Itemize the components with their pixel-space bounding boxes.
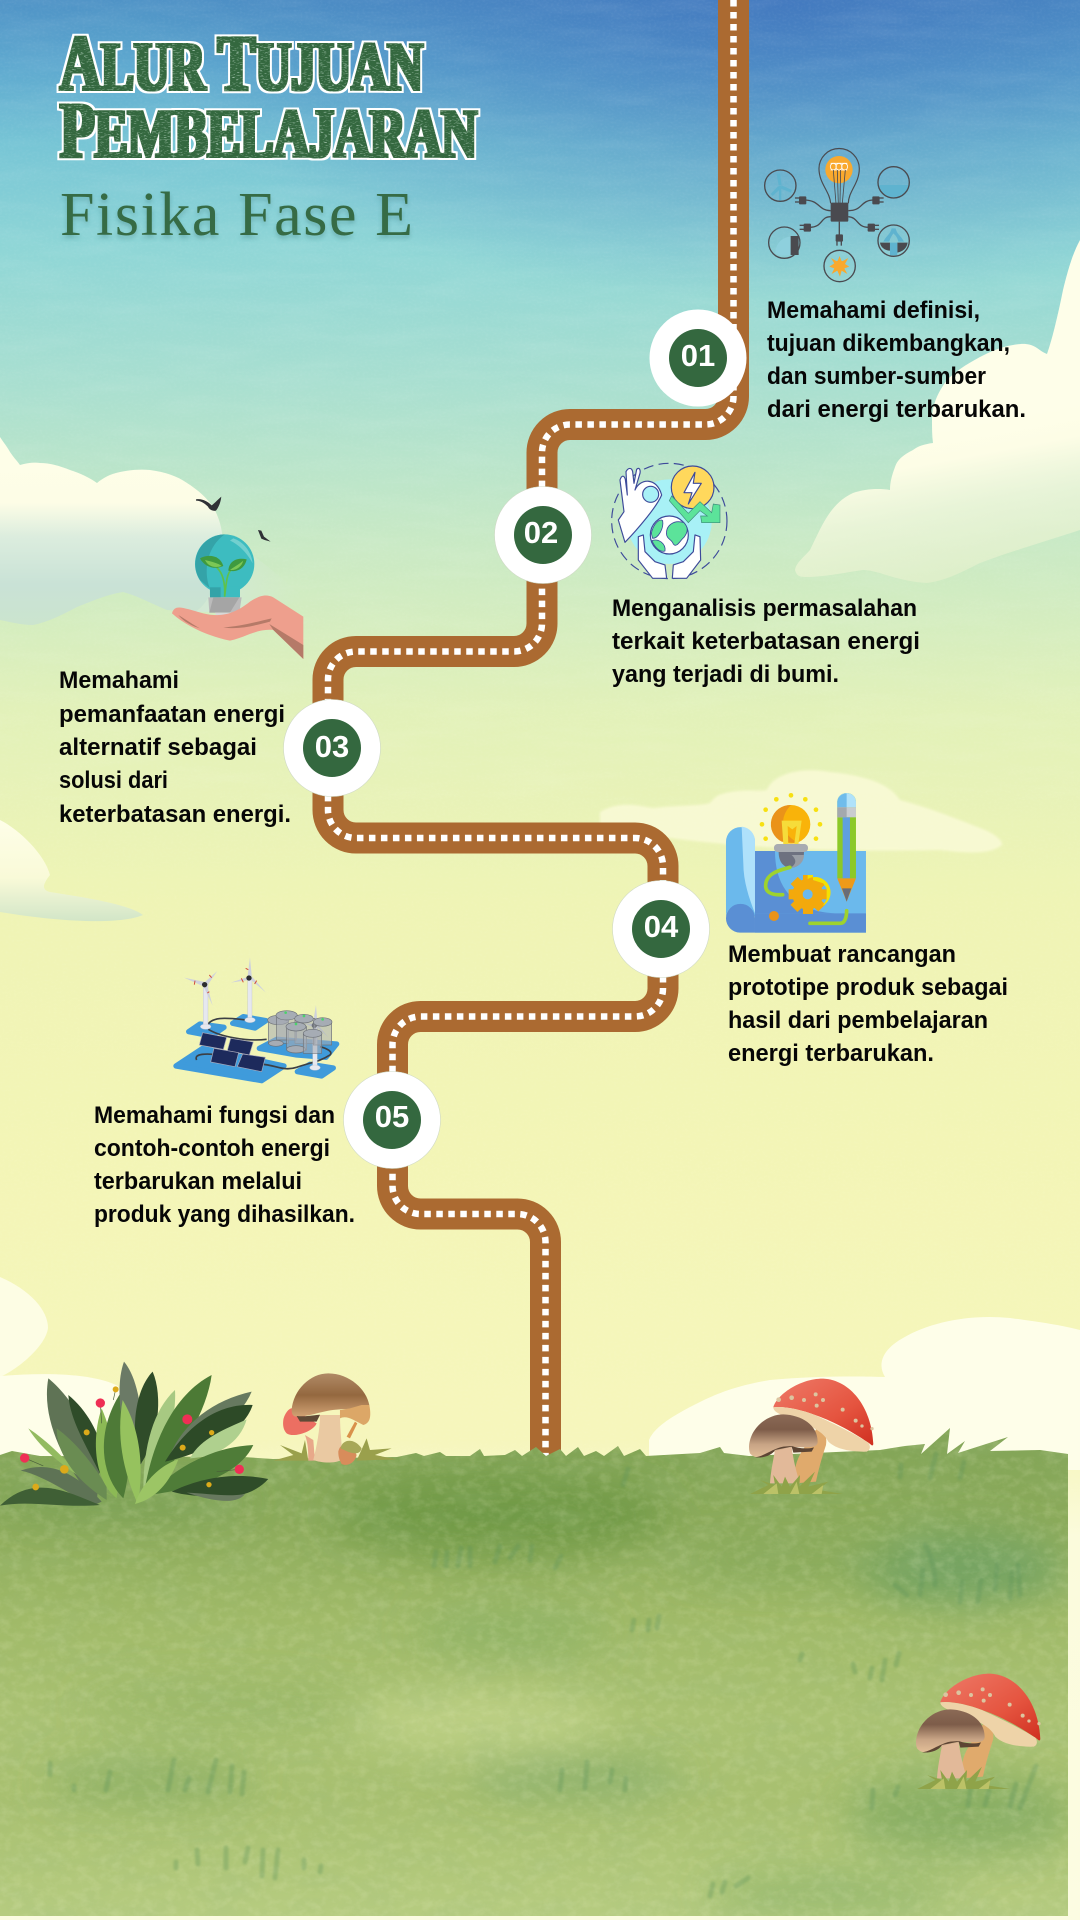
text: step 5 xyxy=(94,1102,355,1228)
cloud: upper right xyxy=(795,240,1080,583)
text: step 3: Memahami xyxy=(59,667,179,694)
title xyxy=(60,20,477,175)
subtitle: Fisika Fase E xyxy=(60,181,413,249)
circle: step 3 number xyxy=(284,700,380,796)
text: step 2: Menganalisis permasalahan xyxy=(612,595,917,622)
text: step 2: terkait keterbatasan energi xyxy=(612,628,920,655)
circle: step 2 number xyxy=(494,486,592,584)
cloud: upper left xyxy=(0,437,305,625)
text: step 1: dari energi terbarukan. xyxy=(767,396,1026,423)
circle: step 5 number xyxy=(344,1072,440,1168)
cloud: middle right behind step 4 xyxy=(600,770,1002,852)
text: step 1: Memahami definisi, xyxy=(767,297,980,324)
circle: step 1 number: 01 xyxy=(681,338,715,373)
text: step 2: yang terjadi di bumi. xyxy=(612,661,839,688)
illustration: plant with berries xyxy=(0,1362,268,1506)
icon: hands, globe and falling energy xyxy=(612,463,727,579)
icon: renewable energy farm xyxy=(176,957,337,1081)
title line two: PEMBELAJARAN xyxy=(60,87,477,175)
text: step 4: prototipe produk sebagai xyxy=(728,974,1008,1001)
icon: renewable energy bulb network xyxy=(765,148,909,282)
subtitle: Fisika Fase E xyxy=(60,184,413,252)
illustration: red mushrooms on the horizon xyxy=(749,1379,874,1494)
text: step 4 xyxy=(728,941,1008,1067)
road: winding brown path xyxy=(328,0,734,1470)
text: step 3 xyxy=(59,667,291,828)
text: step 3: keterbatasan energi. xyxy=(59,801,291,828)
cloud: small left xyxy=(0,820,143,921)
circle: step 4 number xyxy=(612,880,710,978)
text: step 1: tujuan dikembangkan, xyxy=(767,330,1010,357)
circle: step 3 number: 03 xyxy=(315,729,349,764)
cloud: lower left xyxy=(0,1277,150,1470)
circle: step 1 number xyxy=(650,310,746,406)
text: step 4: Membuat rancangan xyxy=(728,941,956,968)
text: step 3: pemanfaatan energi xyxy=(59,701,285,728)
title line one: ALUR TUJUAN xyxy=(60,20,423,108)
circle: step 2 number: 02 xyxy=(524,515,558,550)
icon: hand holding plant bulb xyxy=(172,534,303,659)
text: step 3: alternatif sebagai xyxy=(59,734,257,761)
text: step 1: dan sumber-sumber xyxy=(767,363,986,390)
circle: step 5 number: 05 xyxy=(375,1099,409,1134)
circle: step 4 number: 04 xyxy=(644,909,679,944)
cloud: lower right xyxy=(649,1317,1080,1470)
text: step 5: contoh-contoh energi xyxy=(94,1135,330,1162)
text: step 2 xyxy=(612,595,920,688)
text: step 3: solusi dari xyxy=(59,767,168,794)
text: step 4: energi terbarukan. xyxy=(728,1040,934,1067)
icon: blueprint with bulb, gear and pencil xyxy=(726,793,866,933)
text: step 1 xyxy=(767,297,1026,423)
ground: grass field xyxy=(0,1420,1080,1920)
text: step 5: Memahami fungsi dan xyxy=(94,1102,335,1129)
illustration: brown mushroom and acorn xyxy=(273,1373,397,1465)
text: step 4: hasil dari pembelajaran xyxy=(728,1007,988,1034)
grass tufts xyxy=(50,1454,1036,1896)
text: step 5: produk yang dihasilkan. xyxy=(94,1201,355,1228)
text: step 5: terbarukan melalui xyxy=(94,1168,302,1195)
illustration: red mushrooms in the field xyxy=(916,1674,1041,1789)
icon: birds xyxy=(196,497,271,542)
